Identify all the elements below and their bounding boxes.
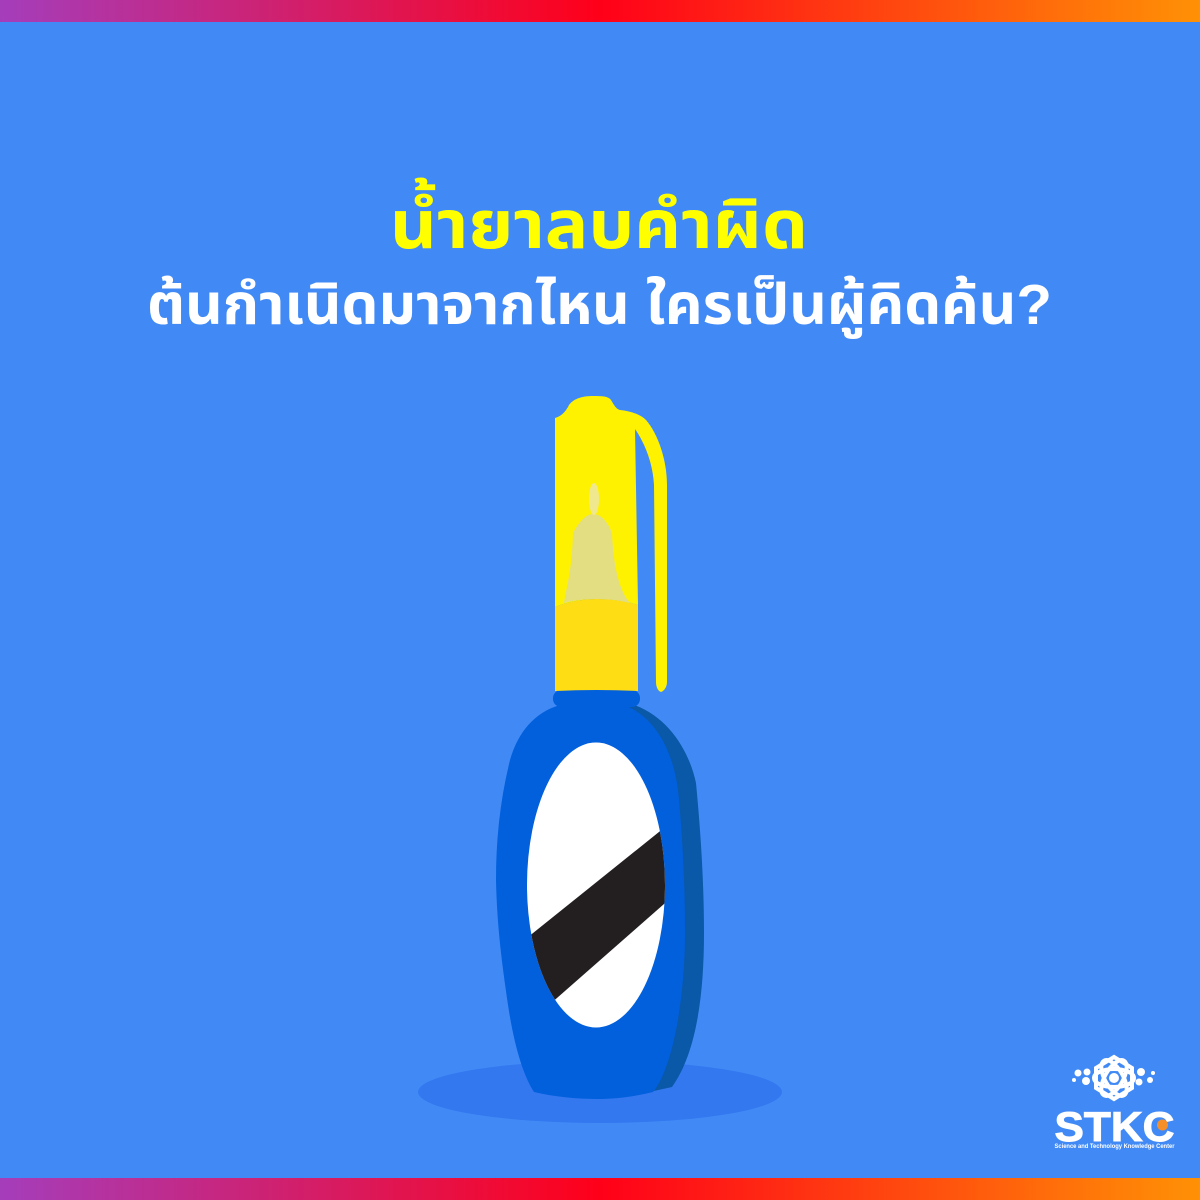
logo orange dot [1157,1120,1168,1130]
top gradient bar [0,0,1200,22]
logo atom icon [1094,1056,1134,1100]
cap collar [555,599,638,691]
logo dots [1072,1068,1155,1086]
ground shadow [418,1061,782,1123]
logo tagline: Science and Technology Knowledge Center [1054,1144,1175,1150]
logo: STKC [1054,1056,1175,1150]
illustration: correction fluid bottle [492,396,705,1099]
applicator tip [589,483,599,515]
title: น้ำยาลบคำผิด [390,177,808,263]
applicator nib [564,514,630,603]
bottle side shade [610,700,704,1094]
label oval [527,742,665,1028]
bottle neck [553,690,640,707]
label stripe [531,831,665,1000]
logo wordmark: STKC [1054,1103,1174,1150]
cap with clip [555,396,667,692]
subtitle: ต้นกำเนิดมาจากไหน ใครเป็นผู้คิดค้น? [147,273,1052,339]
bottom gradient bar [0,1178,1200,1200]
bottle body [496,700,685,1099]
